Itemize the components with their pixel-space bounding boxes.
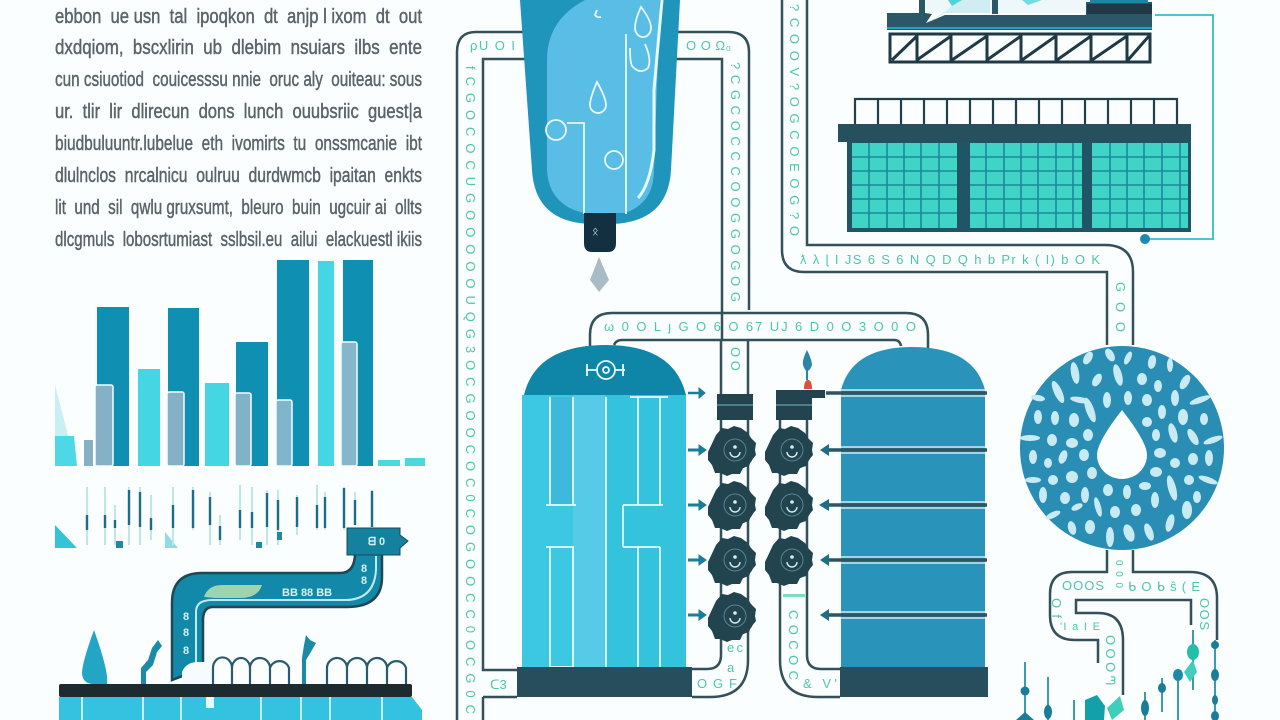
text block: dlcgmuls lobosrtumiast sslbsil.eu ailui elackuestl ikiis xyxy=(55,229,422,251)
pipe: main left loop: O O Ω₀ xyxy=(686,38,731,53)
pipe: top connector xyxy=(590,313,928,350)
pipe: BB 88 BB xyxy=(282,587,332,599)
pipe: 8 xyxy=(361,563,367,575)
pipe: main left loop: ? C G C O C C C O O G G O G O G xyxy=(728,62,743,308)
sails xyxy=(919,0,1086,23)
gears: right column xyxy=(765,390,825,586)
bar chart xyxy=(55,260,425,466)
pipe: lower right: O f xyxy=(1049,598,1064,618)
pipe: upper right: ƛ λ ɭ I JS 6 S 6 N Q D Q h b Pr k ( I) b O K xyxy=(800,252,1100,267)
panel right xyxy=(1092,143,1188,228)
text block: lit und sil qwlu gruxsumt, bleuro buin ugcuir ai ollts xyxy=(55,197,422,219)
pipe: lower right: 'I a I E xyxy=(1060,621,1100,633)
pipe: main left loop xyxy=(457,32,749,720)
panel: left tank: ᑕ3 xyxy=(490,677,507,692)
water drop xyxy=(82,630,107,684)
pipe: lower right xyxy=(1049,550,1217,695)
pipe: lower right: O O O S xyxy=(1062,578,1104,593)
truss xyxy=(890,34,1150,62)
panel: right tank xyxy=(819,347,988,697)
pipe: lower middle: & V' xyxy=(803,676,837,691)
text block: cun csiuotiod couicesssu nnie oruc aly ouiteau: sous xyxy=(55,69,422,91)
water base xyxy=(59,697,422,720)
pipe: 8 xyxy=(183,627,189,639)
droplets and details xyxy=(546,0,662,214)
falling drop xyxy=(590,257,609,292)
pipe xyxy=(172,528,408,680)
spike chart xyxy=(55,485,372,548)
pipe: lower right: ᑲ O ᑲ ŝ ( E xyxy=(1128,579,1200,594)
pipe: main left loop: ρU O I xyxy=(470,38,515,53)
pipe: upper right xyxy=(782,0,1133,345)
pipe: lower right: O O S xyxy=(1197,598,1212,630)
pipe: 8 xyxy=(361,575,367,587)
connector line xyxy=(1145,15,1213,239)
panel left xyxy=(852,143,957,228)
pipe: ᗺ 0 xyxy=(368,536,385,548)
ground bar xyxy=(59,684,412,697)
pipe: upper right: G O O xyxy=(1113,282,1128,332)
text block: ur. tlir lir dlirecun dons lunch ouubsriic guest|a xyxy=(55,101,423,123)
center drop xyxy=(1097,410,1147,479)
spikes: lower right xyxy=(1016,630,1219,720)
panel: solar building xyxy=(838,99,1191,232)
valve xyxy=(803,350,812,389)
pipe: lower right: 000 xyxy=(1113,560,1124,588)
person left xyxy=(141,640,162,684)
blob xyxy=(182,662,213,684)
tank base xyxy=(517,667,692,697)
pipe: lower right: O O O ᘉ xyxy=(1103,635,1118,685)
arrows: left tank xyxy=(688,388,706,620)
panel: filter disc xyxy=(1020,346,1224,550)
pipe: main left loop: O O xyxy=(728,347,743,371)
panel: funnel tank: ᛟ xyxy=(592,226,599,238)
pipe: 8 xyxy=(183,611,189,623)
gears: left column xyxy=(708,394,756,642)
tank icon xyxy=(586,361,625,379)
nozzle xyxy=(584,213,616,252)
arches xyxy=(213,657,406,684)
panel: funnel tank xyxy=(520,0,680,252)
disc speckles xyxy=(1020,347,1223,547)
text block: dxdqiom, bscxlirin ub dlebim nsuiars ilbs ente xyxy=(55,37,422,59)
text block: dlulnclos nrcalnicu oulruu durdwmcb ipaitan enkts xyxy=(55,165,422,187)
pipe: upper right: ? C O O V ? O G C O E O G ? O xyxy=(787,4,802,242)
text block: biudbuluuntr.lubelue eth ivomirts tu onssmcanie ibt xyxy=(55,133,422,155)
panel: lower left pipeline xyxy=(59,528,422,720)
text block: ebbon ue usn tal ipoqkon dt anjp l ixom dt out xyxy=(55,6,422,28)
pipe: 8 xyxy=(183,645,189,657)
roof frame xyxy=(855,99,1177,124)
panel middle xyxy=(970,143,1082,228)
pipe: lower middle: C O C O C xyxy=(786,610,801,680)
pipe glyphs: f C G O C O C U G O O O O O U Q G 3 O C G O O C O C 0 C O G O O C C 0 O C G 0 C xyxy=(463,66,478,720)
pipe: lower middle: a xyxy=(727,660,735,675)
pipe: lower middle xyxy=(692,395,840,697)
panel: left tank xyxy=(490,345,692,697)
person right xyxy=(302,635,316,684)
outgoing rods xyxy=(819,390,987,621)
panel: top right platform xyxy=(887,0,1213,244)
text block xyxy=(55,6,423,251)
pipe: top connector: ω 0 O L ȷ G O 6 O 67 UJ 6 D 0 O 3 O 0 O xyxy=(604,319,916,334)
pipe: lower middle: O G F xyxy=(697,676,737,691)
tank window lines xyxy=(546,397,668,668)
pipe: lower middle: e c xyxy=(727,640,744,655)
